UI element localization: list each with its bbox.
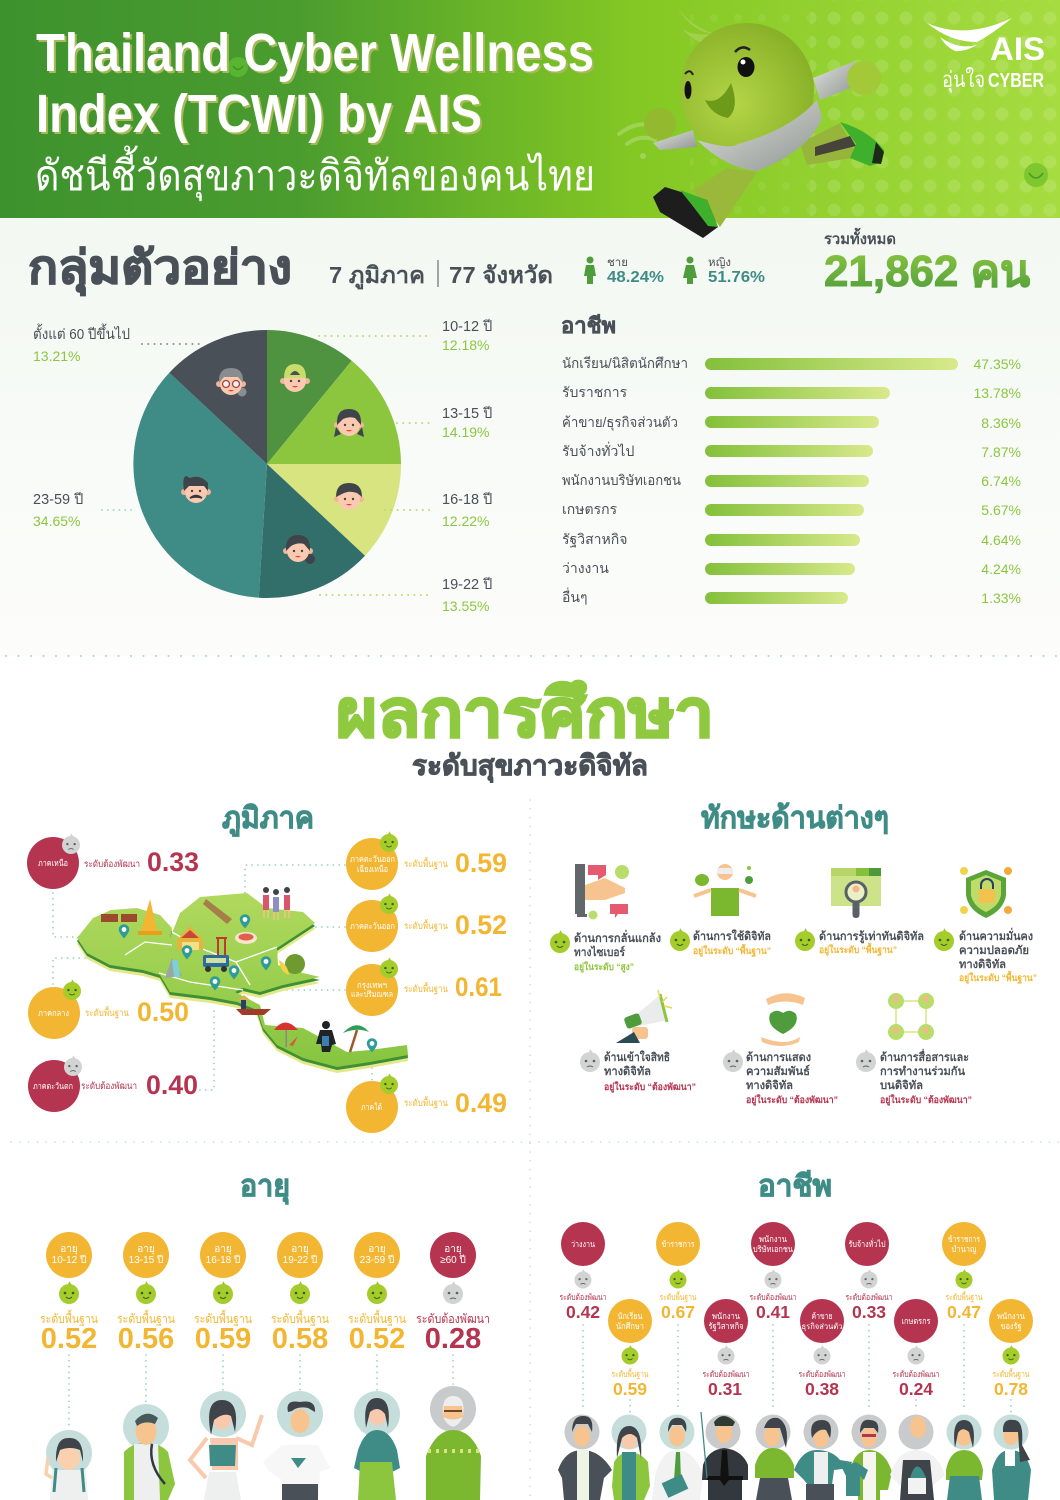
region: central: ภาคกลาง — [38, 1008, 69, 1018]
region: central: ระดับพื้นฐาน — [85, 1006, 129, 1019]
icon: student — [334, 483, 364, 510]
pie label: 13-15 — [442, 405, 492, 440]
skill: communication and collaboration: บนดิจิทัล — [880, 1079, 923, 1092]
skill: cyberbullying resilience: ทางไซเบอร์ — [574, 945, 626, 959]
bar chart: occupations: ว่างงาน — [562, 560, 609, 576]
region: east: ระดับพื้นฐาน — [404, 919, 448, 932]
skill: relationships: ทางดิจิทัล — [746, 1079, 793, 1092]
pie label: 13-15: 14.19% — [442, 424, 489, 440]
occupation: government officers: ระดับพื้นฐาน — [660, 1291, 697, 1303]
skill: cyberbullying resilience: ด้านการกลั่นแกล้ง — [574, 929, 661, 945]
age: 16-18: อายุ — [214, 1244, 232, 1255]
stat: total respondents: รวมทั้งหมด — [824, 227, 896, 248]
bar chart: occupations: 5.67% — [981, 502, 1021, 518]
occupation: unemployed — [558, 1222, 612, 1500]
person: unemployed — [558, 1414, 612, 1500]
pie label: 16-18: 16-18 ปี — [442, 491, 492, 508]
occupation: farmers: เกษตรกร — [902, 1316, 931, 1326]
occupation: unemployed: ว่างงาน — [571, 1239, 595, 1249]
map of Thailand — [77, 887, 408, 1073]
skill: communication and collaboration: ด้านการสื่อสารและ — [880, 1048, 969, 1064]
pie label: 10-12: 10-12 ปี — [442, 318, 492, 335]
chart heading: อาชีพ — [561, 313, 616, 338]
pie chart: age groups — [133, 330, 401, 598]
age: 23-59: ระดับพื้นฐาน — [348, 1309, 406, 1326]
icon: hands around heart — [761, 993, 805, 1046]
stat: female share: หญิง — [708, 256, 731, 269]
age: 10-12 — [40, 1232, 98, 1500]
region: northeast: เฉียงเหนือ — [357, 864, 388, 874]
landmark: boat — [236, 995, 271, 1015]
occupation: private company employees: บริษัทเอกชน — [753, 1244, 793, 1254]
person: doctor officer — [652, 1414, 703, 1500]
occupation: farmers — [890, 1299, 945, 1500]
pie label: 19-22: 13.55% — [442, 598, 489, 614]
occupation: general contractors — [842, 1222, 892, 1500]
occupation: students: นักศึกษา — [616, 1321, 644, 1331]
landmark: dancers — [263, 887, 290, 920]
stat: total respondents: 21,862 คน — [824, 247, 1030, 296]
bar chart: occupations: รัฐวิสาหกิจ — [562, 531, 627, 548]
region: north — [27, 833, 199, 889]
icon: person with VR headset — [694, 864, 756, 916]
region: northeast: 0.59 — [455, 848, 507, 878]
age: 23-59 — [348, 1232, 406, 1500]
icon: megaphone — [616, 990, 672, 1043]
occupation: general contractors: 0.33 — [852, 1302, 886, 1322]
age: 10-12: 10-12 ปี — [52, 1254, 86, 1266]
region: west: ระดับต้องพัฒนา — [81, 1081, 137, 1092]
occupation: government officers — [652, 1222, 703, 1500]
bar chart: occupations: นักเรียน/นิสิตนักศึกษา — [562, 355, 688, 371]
logo: AIS: AIS — [990, 31, 1045, 67]
icon: wifi watermark — [619, 124, 660, 159]
region: bangkok: 0.61 — [455, 972, 502, 1002]
bar chart: occupations: รับจ้างทั่วไป — [562, 442, 634, 459]
heading: age: อายุ — [240, 1170, 290, 1205]
pie label: 10-12: 12.18% — [442, 337, 489, 353]
stat: female share — [683, 256, 765, 286]
region: west — [28, 1055, 198, 1112]
region: south — [346, 1073, 507, 1133]
age: 60+: 0.28 — [425, 1323, 481, 1355]
region: east: 0.52 — [455, 910, 507, 940]
pie label: 60+: ตั้งแต่ 60 ปีขึ้นไป — [33, 323, 130, 343]
stat: female share: 51.76% — [708, 269, 765, 286]
occupation: merchants and business owners: ค้าขาย — [812, 1311, 833, 1321]
region: central — [28, 979, 189, 1039]
skill: relationships: ด้านการแสดง — [746, 1051, 811, 1064]
bar chart: occupations: 4.24% — [981, 561, 1021, 577]
age: 16-18 — [190, 1232, 262, 1500]
occupation: pensioners: ระดับพื้นฐาน — [946, 1291, 983, 1303]
skill: digital security — [934, 867, 1037, 985]
occupation: merchants and business owners: ระดับต้องพัฒนา — [798, 1369, 846, 1379]
age: 60+: อายุ — [444, 1244, 462, 1255]
bar chart: occupations: 7.87% — [981, 444, 1021, 460]
occupation: private company employees: พนักงาน — [759, 1234, 787, 1244]
age: 16-18: 0.59 — [195, 1323, 251, 1355]
age: 19-22: 19-22 ปี — [283, 1254, 317, 1266]
skill: cyberbullying resilience: อยู่ในระดับ “สูง” — [574, 961, 634, 974]
age: 16-18: 16-18 ปี — [206, 1254, 240, 1266]
icon: shield with lock — [960, 867, 1012, 918]
person: shop worker — [842, 1414, 892, 1500]
occupation: students: 0.59 — [613, 1379, 647, 1399]
icon: senior — [216, 368, 246, 396]
occupation: state employees: ของรัฐ — [1000, 1321, 1022, 1332]
occupation: pensioners: บำนาญ — [952, 1244, 976, 1254]
icon: teen — [334, 409, 364, 437]
age: 16-18: ระดับพื้นฐาน — [194, 1309, 252, 1326]
occupation: private company employees: 0.41 — [756, 1302, 790, 1322]
person: office woman — [755, 1414, 794, 1500]
age: 60+: ระดับต้องพัฒนา — [416, 1312, 490, 1326]
icon: smile badge — [1024, 163, 1048, 187]
age: 60+ — [416, 1232, 490, 1500]
pie connector lines — [102, 336, 432, 595]
pie label: 23-59 — [33, 491, 83, 529]
region borders — [125, 932, 277, 1024]
region: northeast — [346, 831, 507, 890]
text: regions and provinces — [329, 260, 553, 290]
skill: digital literacy: อยู่ในระดับ “พื้นฐาน” — [819, 942, 897, 957]
person: student — [612, 1414, 650, 1500]
skill: digital usage: อยู่ในระดับ “พื้นฐาน” — [693, 943, 771, 958]
title: Index (TCWI) by AIS — [36, 84, 482, 144]
pie label: 19-22: 19-22 ปี — [442, 576, 492, 593]
occupation: government officers: 0.67 — [661, 1302, 695, 1322]
landmark: northern temple and wall — [101, 899, 162, 935]
skill: digital security: ความปลอดภัย — [959, 944, 1029, 957]
logo: AIS: CYBER — [988, 70, 1044, 92]
skill: digital rights: ทางดิจิทัล — [604, 1065, 651, 1078]
age: 10-12: 0.52 — [41, 1323, 97, 1355]
skill: digital literacy: ด้านการรู้เท่าทันดิจิทัล — [819, 930, 924, 944]
occupation: state enterprise employees: 0.31 — [708, 1379, 742, 1399]
person: adult woman — [354, 1391, 400, 1500]
occupation: state employees — [989, 1299, 1033, 1500]
title: Thailand Cyber Wellness — [36, 23, 594, 83]
pie label: 10-12 — [442, 318, 492, 353]
age: 19-22: 0.58 — [272, 1323, 328, 1355]
heading: sample group: กลุ่มตัวอย่าง — [28, 241, 292, 296]
occupation: state enterprise employees: รัฐวิสาหกิจ — [708, 1321, 744, 1332]
occupation: merchants and business owners: ธุรกิจส่วนตัว — [802, 1322, 842, 1331]
stat: male share: ชาย — [607, 257, 628, 269]
person: senior man — [426, 1386, 481, 1500]
pie label: 60+ — [33, 323, 130, 364]
pie label: 19-22 — [442, 576, 492, 614]
region: north: ระดับต้องพัฒนา — [84, 859, 140, 870]
header banner — [0, 0, 1060, 238]
skill: communication and collaboration: อยู่ในระดับ “ต้องพัฒนา” — [880, 1094, 972, 1107]
skill: cyberbullying resilience — [550, 864, 661, 974]
region: bangkok: ระดับพื้นฐาน — [404, 982, 448, 995]
occupation: merchants and business owners: 0.38 — [805, 1379, 839, 1399]
occupation: students: นักเรียน — [618, 1311, 643, 1321]
occupation: merchants and business owners — [794, 1299, 852, 1500]
person: young man — [263, 1391, 330, 1500]
skill: relationships — [723, 993, 838, 1107]
age: 19-22: อายุ — [291, 1244, 309, 1255]
bar chart: occupations — [561, 313, 1021, 606]
bar chart: occupations: 1.33% — [981, 590, 1021, 606]
bar chart: occupations: 4.64% — [981, 532, 1021, 548]
region: northeast: ระดับพื้นฐาน — [404, 857, 448, 870]
region: bangkok: และปริมณฑล — [351, 989, 393, 999]
skill: digital rights: ด้านเข้าใจสิทธิ — [604, 1050, 670, 1064]
landmark: durian — [279, 954, 305, 975]
region: central: 0.50 — [137, 997, 189, 1027]
skill: communication and collaboration — [856, 993, 972, 1107]
occupation: state employees: 0.78 — [994, 1379, 1028, 1399]
occupation: state enterprise employees: พนักงาน — [712, 1311, 740, 1321]
age: 60+: ≥60 ปี — [440, 1254, 466, 1266]
pie label: 16-18: 12.22% — [442, 513, 489, 529]
occupation: unemployed: 0.42 — [566, 1302, 600, 1322]
skill: relationships: ความสัมพันธ์ — [746, 1064, 810, 1078]
logo: AIS — [927, 18, 1045, 93]
subtitle: ดัชนีชี้วัดสุขภาวะดิจิทัลของคนไทย — [35, 145, 595, 202]
occupation: government officers: ข้าราชการ — [662, 1239, 695, 1249]
person: farmer — [890, 1414, 945, 1500]
occupation: state enterprise employees: ระดับต้องพัฒนา — [702, 1369, 750, 1379]
landmark: tuk tuk and swing — [203, 938, 229, 972]
occupation: pensioners — [942, 1222, 986, 1500]
occupation: state employees: พนักงาน — [997, 1311, 1025, 1321]
icon: title smile — [228, 57, 248, 77]
region: bangkok: กรุงเทพฯ — [357, 980, 387, 991]
occupation: general contractors: ระดับต้องพัฒนา — [846, 1292, 892, 1302]
bar chart: occupations: รับราชการ — [562, 384, 628, 400]
skill: digital security: ทางดิจิทัล — [959, 958, 1006, 971]
icon: connected people — [888, 993, 934, 1040]
age: 10-12: อายุ — [60, 1244, 78, 1255]
heading: skills: ทักษะด้านต่างๆ — [701, 802, 889, 835]
landmark: shadow puppet — [316, 1021, 336, 1052]
landmark: beach umbrella — [274, 1022, 298, 1047]
icon: adult — [181, 476, 211, 503]
region: south: ภาคใต้ — [361, 1102, 382, 1112]
bar chart: occupations: 6.74% — [981, 473, 1021, 489]
pie label: 16-18 — [442, 491, 492, 529]
region: northeast: ภาคตะวันออก — [350, 854, 395, 864]
bar chart: occupations: ค้าขาย/ธุรกิจส่วนตัว — [562, 414, 678, 431]
age: 23-59: 0.52 — [349, 1323, 405, 1355]
age: 13-15: อายุ — [137, 1244, 155, 1255]
region: east — [346, 893, 507, 952]
pie label: 23-59: 34.65% — [33, 513, 80, 529]
pie label: 13-15: 13-15 ปี — [442, 405, 492, 422]
occupation: private company employees — [750, 1222, 796, 1500]
region: south: 0.49 — [455, 1088, 507, 1118]
bar chart: occupations: 8.36% — [981, 415, 1021, 431]
stat: male share: 48.24% — [607, 269, 664, 286]
bar chart: occupations: เกษตรกร — [562, 501, 618, 517]
occupation: state enterprise employees — [701, 1299, 750, 1500]
map connector lines — [53, 865, 372, 1090]
landmark: grand palace — [177, 926, 203, 950]
region: bangkok — [346, 957, 502, 1016]
skill: digital security: ด้านความมั่นคง — [959, 927, 1033, 943]
occupation: unemployed: ระดับต้องพัฒนา — [560, 1292, 606, 1302]
bar chart: occupations: อื่นๆ — [562, 588, 588, 605]
skill: digital usage — [670, 864, 771, 958]
skill: relationships: อยู่ในระดับ “ต้องพัฒนา” — [746, 1094, 838, 1107]
text: regions and provinces: 77 จังหวัด — [449, 262, 553, 288]
skill: digital rights — [580, 990, 696, 1094]
text: regions and provinces: 7 ภูมิภาค — [329, 262, 425, 290]
age: 19-22 — [263, 1232, 330, 1500]
heading: occupation: อาชีพ — [758, 1170, 832, 1203]
occupation: state employees: ระดับพื้นฐาน — [992, 1368, 1030, 1380]
subheading: digital wellness level: ระดับสุขภาวะดิจิทัล — [412, 750, 648, 783]
icon: young adult — [283, 535, 315, 564]
icon: running mascot — [644, 8, 884, 238]
region: west: 0.40 — [146, 1070, 198, 1100]
stat: male share — [584, 256, 664, 286]
landmark: palm tree — [343, 1025, 369, 1052]
age: 23-59: อายุ — [368, 1244, 386, 1255]
occupation: private company employees: ระดับต้องพัฒนา — [750, 1292, 796, 1302]
occupation: farmers: ระดับต้องพัฒนา — [892, 1369, 940, 1379]
title — [36, 23, 594, 144]
person: young woman — [190, 1391, 262, 1500]
landmark: phanom rung and papaya salad — [203, 899, 257, 944]
region: east: ภาคตะวันออก — [350, 921, 395, 931]
skill: digital security: อยู่ในระดับ “พื้นฐาน” — [959, 970, 1037, 985]
age: 13-15: ระดับพื้นฐาน — [117, 1309, 175, 1326]
age: 13-15: 13-15 ปี — [129, 1254, 163, 1266]
heading: study results: ผลการศึกษา — [336, 676, 714, 750]
region: south: ระดับพื้นฐาน — [404, 1096, 448, 1109]
landmark: waterfall — [165, 958, 182, 978]
person: doctor — [992, 1414, 1031, 1500]
logo: AIS: อุ่นใจ — [942, 67, 985, 93]
region: north: 0.33 — [147, 847, 199, 877]
bar chart: occupations: 13.78% — [974, 385, 1021, 401]
occupation: pensioners: 0.47 — [947, 1302, 981, 1322]
occupation: general contractors: รับจ้างทั่วไป — [848, 1238, 886, 1249]
skill: digital usage: ด้านการใช้ดิจิทัล — [693, 929, 771, 943]
icon: map pins — [119, 914, 377, 1052]
bar chart: occupations: พนักงานบริษัทเอกชน — [562, 472, 681, 488]
skill: digital rights: อยู่ในระดับ “ต้องพัฒนา” — [604, 1081, 696, 1094]
person: officer in uniform — [701, 1412, 748, 1500]
occupation: farmers: 0.24 — [899, 1379, 933, 1399]
occupation: students — [608, 1299, 652, 1500]
person: child — [46, 1430, 92, 1500]
person: business woman — [794, 1414, 852, 1500]
skill: communication and collaboration: การทำงานร่วมกัน — [880, 1064, 965, 1078]
person: teen — [123, 1404, 175, 1500]
age: 19-22: ระดับพื้นฐาน — [271, 1309, 329, 1326]
age: 23-59: 23-59 ปี — [360, 1254, 394, 1266]
bar chart: occupations: 47.35% — [974, 356, 1021, 372]
icon: hand pointing from screen — [575, 864, 629, 920]
region: west: ภาคตะวันตก — [33, 1081, 73, 1091]
icon: child — [280, 364, 310, 392]
person: retired woman — [946, 1414, 983, 1500]
icon: window with magnifier — [831, 868, 881, 918]
pie label: 23-59: 23-59 ปี — [33, 491, 83, 508]
age: 13-15 — [117, 1232, 175, 1500]
background: sample section — [0, 218, 1060, 656]
skill: digital literacy — [795, 868, 924, 957]
region: north: ภาคเหนือ — [38, 858, 68, 868]
heading: regions: ภูมิภาค — [222, 802, 314, 837]
pie label: 60+: 13.21% — [33, 348, 80, 364]
occupation: pensioners: ข้าราชการ — [948, 1234, 980, 1244]
occupation: students: ระดับพื้นฐาน — [612, 1368, 649, 1380]
age: 10-12: ระดับพื้นฐาน — [40, 1309, 98, 1326]
age: 13-15: 0.56 — [118, 1323, 174, 1355]
